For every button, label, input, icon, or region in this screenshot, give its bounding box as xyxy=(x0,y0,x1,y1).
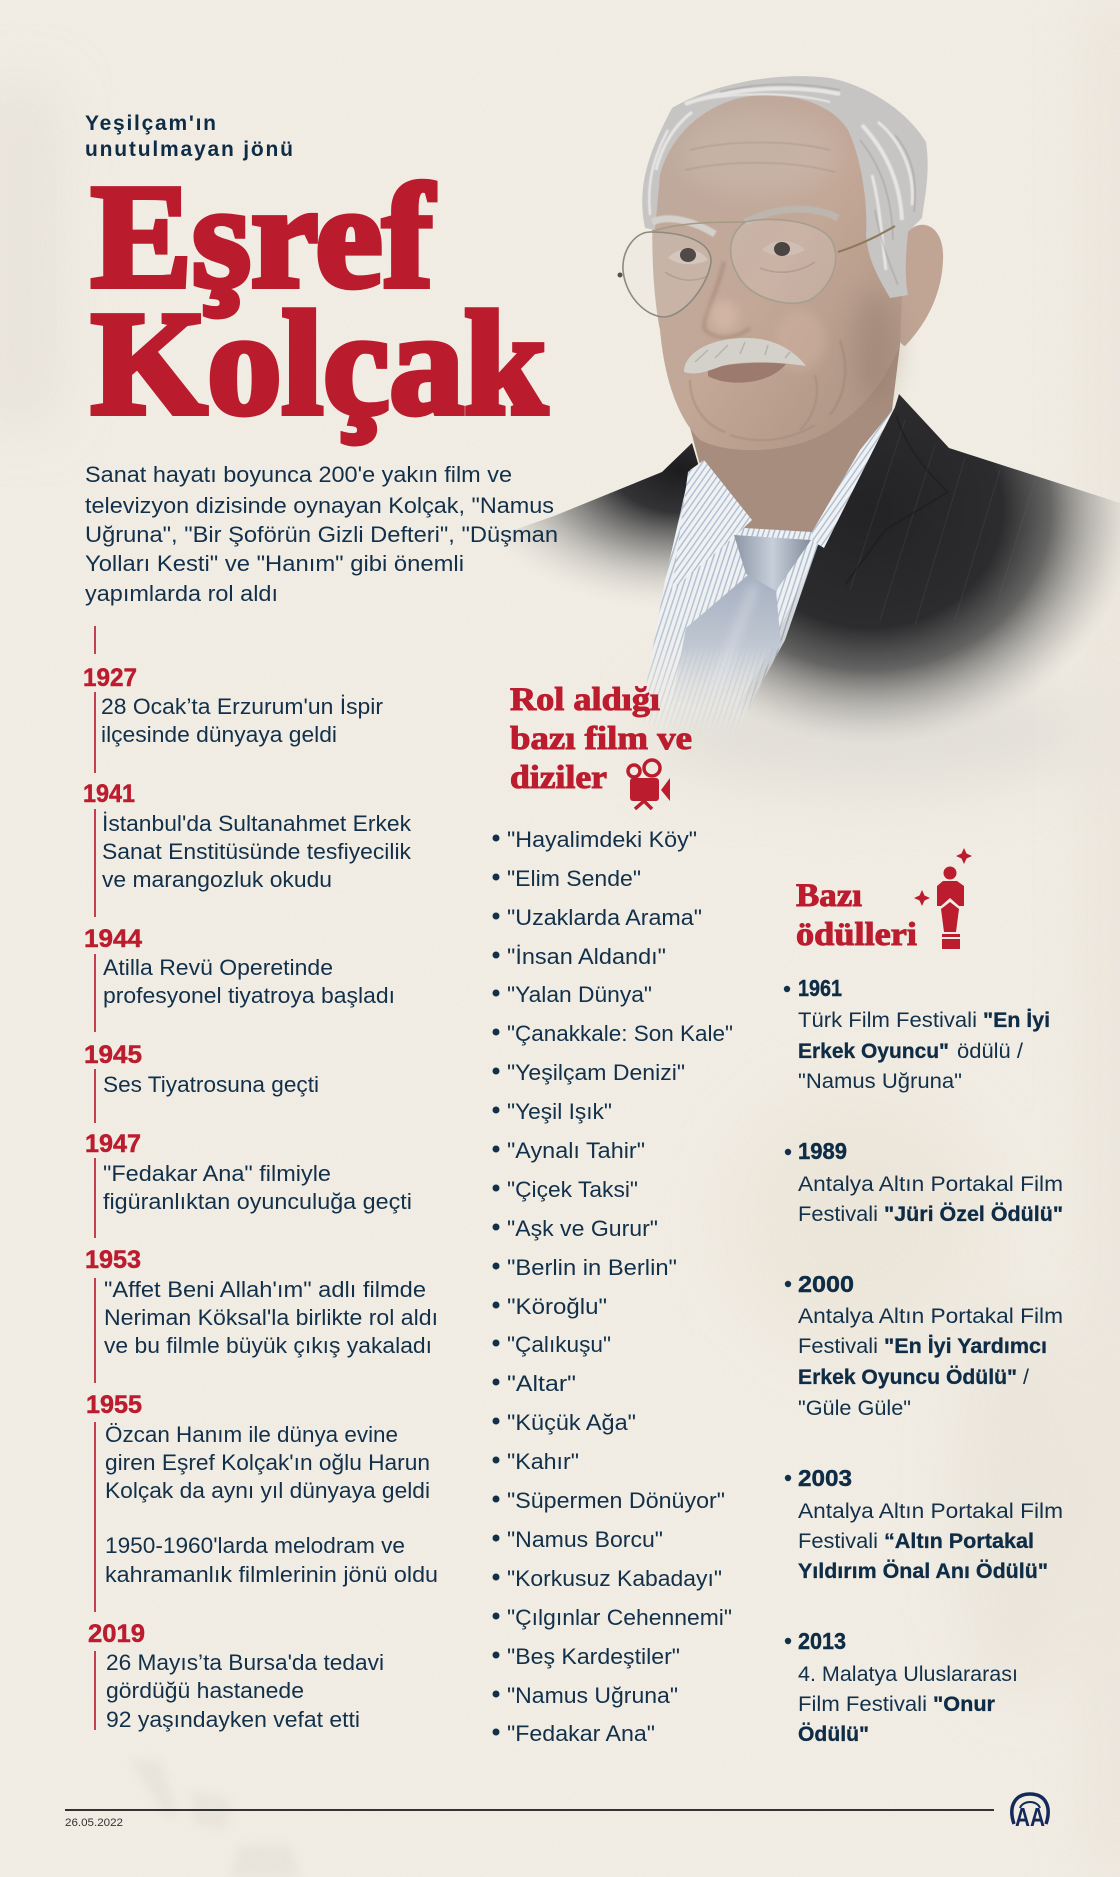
timeline entry 2019: 2019 xyxy=(88,1620,145,1648)
film list: "İnsan Aldandı" xyxy=(507,944,666,969)
timeline entry 1947 xyxy=(85,1130,412,1238)
subtitle: Yeşilçam'ın xyxy=(85,112,216,135)
timeline entry 1955: kahramanlık filmlerinin jönü oldu xyxy=(105,1562,438,1587)
award 1961 xyxy=(784,975,1050,1093)
timeline entry 1955: giren Eşref Kolçak'ın oğlu Harun xyxy=(105,1450,430,1475)
timeline entry 1953: 1953 xyxy=(85,1246,141,1274)
ear xyxy=(896,225,943,346)
award 1989: Antalya Altın Portakal Film xyxy=(798,1172,1063,1196)
intro paragraph: Yolları Kesti" ve "Hanım" gibi önemli xyxy=(85,551,464,576)
film list: "Uzaklarda Arama" xyxy=(507,905,702,930)
film list: "Berlin in Berlin" xyxy=(507,1255,677,1280)
eyes xyxy=(665,241,815,280)
timeline entry 1955: 1955 xyxy=(86,1391,142,1419)
moustache xyxy=(684,338,806,373)
timeline entry 1944: Atilla Revü Operetinde xyxy=(103,955,333,980)
panel: films and series xyxy=(492,682,733,1746)
film list: "Hayalimdeki Köy" xyxy=(507,827,697,852)
jacket left xyxy=(459,443,700,675)
timeline entry 1955: Kolçak da aynı yıl dünyaya geldi xyxy=(105,1478,430,1503)
timeline entry 2019 xyxy=(88,1620,384,1732)
film list: "Namus Borcu" xyxy=(507,1527,663,1552)
film list: "Yeşilçam Denizi" xyxy=(507,1060,685,1085)
intro paragraph: televizyon dizisinde oynayan Kolçak, "Namus xyxy=(85,493,554,518)
award 2003: 2003 xyxy=(798,1465,852,1491)
timeline entry 1955: Özcan Hanım ile dünya evine xyxy=(105,1422,398,1447)
icon: award statuette with stars xyxy=(914,848,972,949)
timeline entry 1953: "Affet Beni Allah'ım" adlı filmde xyxy=(104,1277,426,1302)
film list: "Elim Sende" xyxy=(507,866,641,891)
film list: "Çiçek Taksi" xyxy=(507,1177,638,1202)
award 2000 xyxy=(785,1271,1063,1420)
timeline entry 1927: 1927 xyxy=(83,664,137,692)
intro paragraph xyxy=(85,462,558,606)
award 1961: ödülü / xyxy=(957,1039,1023,1063)
film list: "Yeşil Işık" xyxy=(507,1099,612,1124)
logo: AA agency mark xyxy=(1012,1794,1048,1832)
nose xyxy=(704,262,750,337)
neck xyxy=(688,345,900,532)
film list: "Çalıkuşu" xyxy=(507,1332,611,1357)
film list: "Köroğlu" xyxy=(507,1294,607,1319)
timeline entry 1955: 1950-1960'larda melodram ve xyxy=(105,1533,405,1558)
award 1989: 1989 xyxy=(798,1138,847,1164)
timeline entry 1953: ve bu filmle büyük çıkış yakaladı xyxy=(104,1333,432,1358)
timeline entry 1927 xyxy=(83,664,383,773)
films heading: diziler xyxy=(510,760,607,796)
award 1961: Erkek Oyuncu" xyxy=(798,1039,949,1063)
award 2013: 2013 xyxy=(798,1628,846,1654)
title xyxy=(91,155,548,446)
film list: "Aşk ve Gurur" xyxy=(507,1216,658,1241)
films heading xyxy=(510,682,692,796)
award 1961: Türk Film Festivali xyxy=(798,1008,977,1032)
award 1989: Festivali xyxy=(798,1202,878,1226)
award 2000: Erkek Oyuncu Ödülü" xyxy=(798,1364,1017,1389)
timeline entry 1927: ilçesinde dünyaya geldi xyxy=(101,722,337,747)
award 1961: "Namus Uğruna" xyxy=(798,1069,962,1093)
film list: "Küçük Ağa" xyxy=(507,1410,636,1435)
timeline entry 2019: 26 Mayıs’ta Bursa'da tedavi xyxy=(106,1650,384,1675)
award 2000: 2000 xyxy=(798,1271,854,1297)
shirt xyxy=(640,408,895,722)
awards heading: ödülleri xyxy=(796,917,917,953)
timeline entry 1941: ve marangozluk okudu xyxy=(102,867,332,892)
award 2013 xyxy=(785,1628,1018,1746)
timeline entry 1927: 28 Ocak’ta Erzurum'un İspir xyxy=(101,694,383,719)
timeline entry 1941: İstanbul'da Sultanahmet Erkek xyxy=(102,811,412,836)
award 2003: Yıldırım Önal Anı Ödülü" xyxy=(798,1558,1048,1583)
award 2000: / xyxy=(1023,1365,1029,1389)
title: Kolçak xyxy=(91,282,548,446)
subtitle xyxy=(85,112,293,161)
background haze under portrait xyxy=(650,670,1090,790)
shirt collars xyxy=(672,407,895,590)
award 1961: "En İyi xyxy=(983,1008,1050,1032)
timeline entry 1945: 1945 xyxy=(84,1041,142,1069)
film list: "Yalan Dünya" xyxy=(507,982,652,1007)
award 2003: Festivali xyxy=(798,1529,878,1553)
date: 26.05.2022 xyxy=(65,1817,123,1829)
film list: "Korkusuz Kabadayı" xyxy=(507,1566,722,1591)
timeline start line xyxy=(94,626,96,654)
timeline entry 1944 xyxy=(84,925,395,1032)
timeline entry 2019: gördüğü hastanede xyxy=(106,1678,304,1703)
award 1989: "Jüri Özel Ödülü" xyxy=(884,1201,1063,1226)
panel: awards xyxy=(784,848,1063,1746)
hair xyxy=(642,76,928,298)
award 2003: Antalya Altın Portakal Film xyxy=(798,1499,1063,1523)
award 2000: "En İyi Yardımcı xyxy=(884,1334,1047,1358)
film list: "Fedakar Ana" xyxy=(507,1721,655,1746)
intro paragraph: yapımlarda rol aldı xyxy=(85,581,278,606)
film list: "Beş Kardeştiler" xyxy=(507,1644,680,1669)
award 1989 xyxy=(785,1138,1063,1226)
award 2003 xyxy=(785,1465,1063,1583)
timeline entry 1941: Sanat Enstitüsünde tesfiyecilik xyxy=(102,839,412,864)
film list: "Aynalı Tahir" xyxy=(507,1138,645,1163)
timeline entry 1947: 1947 xyxy=(85,1130,141,1158)
necktie xyxy=(672,535,811,716)
films heading: Rol aldığı xyxy=(510,682,660,718)
timeline entry 1941 xyxy=(83,780,412,917)
portrait photo of Eşref Kolçak xyxy=(459,76,1120,790)
timeline entry 1947: "Fedakar Ana" filmiyle xyxy=(103,1161,331,1186)
film list: "Namus Uğruna" xyxy=(507,1683,678,1708)
timeline entry 1955 xyxy=(86,1391,438,1612)
award 2013: Film Festivali xyxy=(798,1692,927,1716)
timeline entry 1944: profesyonel tiyatroya başladı xyxy=(103,983,395,1008)
award 2013: 4. Malatya Uluslararası xyxy=(798,1662,1018,1686)
timeline entry 1945 xyxy=(84,1041,319,1123)
timeline entry 1944: 1944 xyxy=(84,925,142,953)
award 2013: "Onur xyxy=(933,1692,996,1716)
award 2013: Ödülü" xyxy=(798,1721,869,1746)
timeline entry 1945: Ses Tiyatrosuna geçti xyxy=(103,1072,319,1097)
award 2003: “Altın Portakal xyxy=(884,1529,1034,1553)
glasses xyxy=(618,219,895,317)
logo: AA agency mark: AA xyxy=(1015,1802,1045,1832)
icon: film camera xyxy=(628,760,670,809)
award 1961: 1961 xyxy=(798,975,842,1001)
jacket right xyxy=(690,394,1120,790)
timeline entry 1953: Neriman Köksal'la birlikte rol aldı xyxy=(104,1305,438,1330)
film list: "Süpermen Dönüyor" xyxy=(507,1488,725,1513)
timeline entry 1953 xyxy=(85,1246,438,1383)
title: Eşref xyxy=(91,155,435,319)
awards heading: Bazı xyxy=(796,878,862,914)
timeline entry 1941: 1941 xyxy=(83,780,135,808)
intro paragraph: Sanat hayatı boyunca 200'e yakın film ve xyxy=(85,462,512,487)
eyebrows xyxy=(652,209,838,234)
film list: "Çılgınlar Cehennemi" xyxy=(507,1605,732,1630)
footer xyxy=(65,1794,1048,1832)
award 2000: Antalya Altın Portakal Film xyxy=(798,1304,1063,1328)
film list: "Çanakkale: Son Kale" xyxy=(507,1021,733,1046)
film list: "Altar" xyxy=(507,1371,576,1396)
intro paragraph: Uğruna", "Bir Şoförün Gizli Defteri", "Düşman xyxy=(85,522,558,547)
award 2000: Festivali xyxy=(798,1334,878,1358)
mouth xyxy=(708,363,786,383)
timeline entry 1947: figüranlıktan oyunculuğa geçti xyxy=(103,1189,412,1214)
subtitle: unutulmayan jönü xyxy=(85,138,293,161)
timeline entry 2019: 92 yaşındayken vefat etti xyxy=(106,1707,360,1732)
panel: timeline xyxy=(83,626,438,1732)
award 2000: "Güle Güle" xyxy=(798,1396,911,1420)
face xyxy=(652,92,903,450)
film list: "Kahır" xyxy=(507,1449,579,1474)
awards heading xyxy=(796,878,917,953)
film list xyxy=(492,827,733,1746)
films heading: bazı film ve xyxy=(510,721,692,757)
